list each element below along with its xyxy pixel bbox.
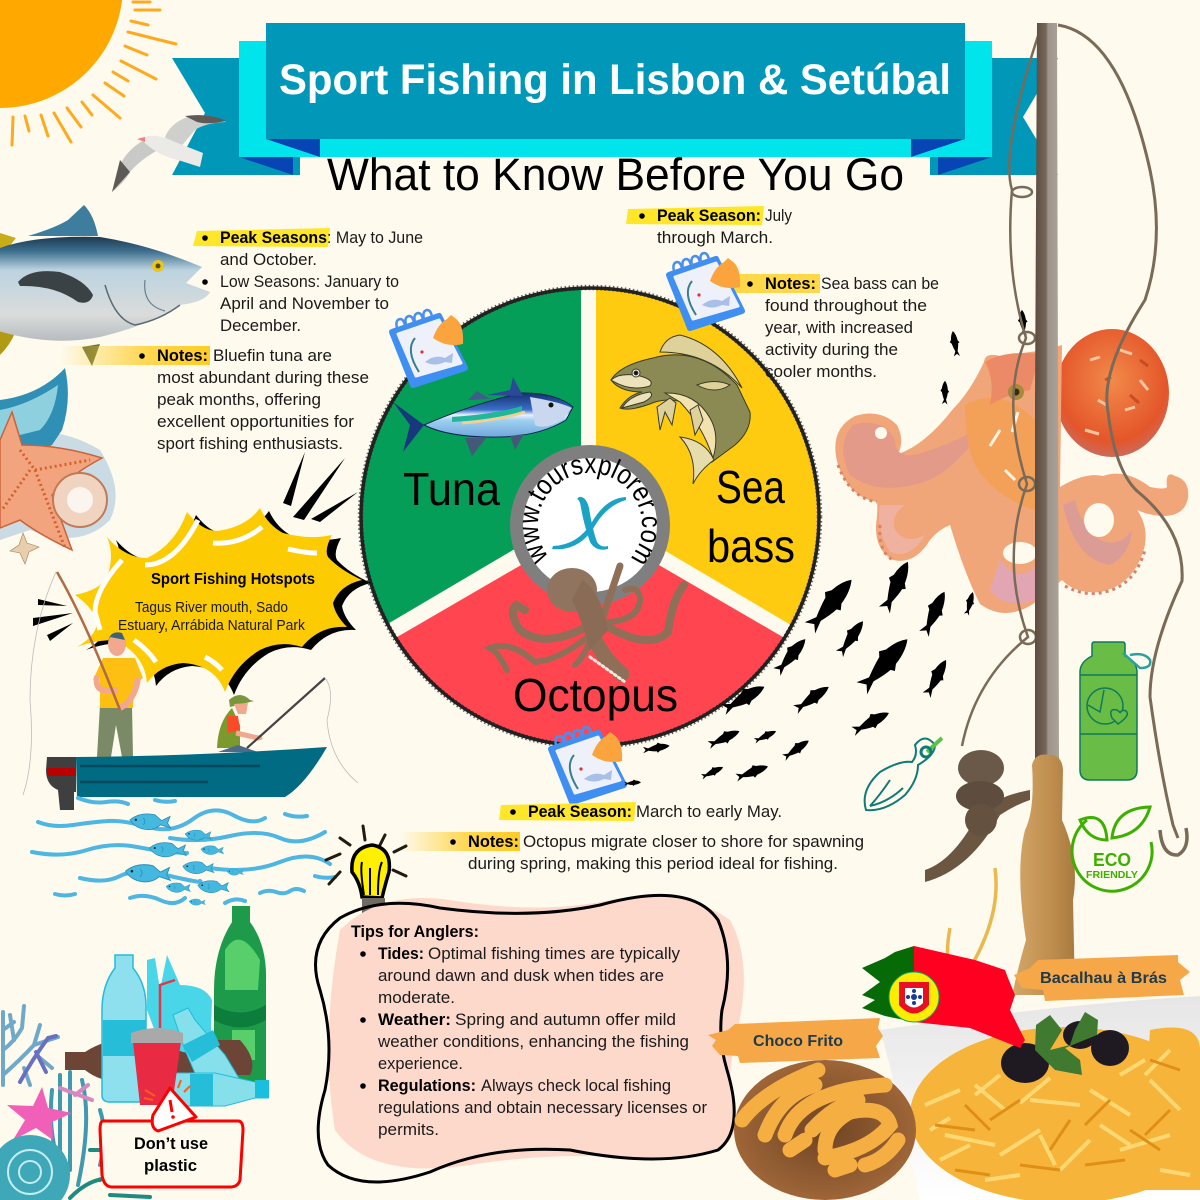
panel: tips for anglers: regulations and obtain necessary licenses or (378, 1098, 707, 1117)
panel: tips for anglers: Tips for Anglers: (351, 922, 479, 941)
text block: tuna: excellent opportunities for (157, 412, 354, 431)
icon: burst spikes left (33, 599, 73, 641)
icon: burst spikes right (283, 452, 358, 522)
panel: tips for anglers: experience. (378, 1054, 463, 1073)
text block: sea bass: year, with increased (765, 318, 913, 337)
text block: tuna: Low Seasons: January to (220, 272, 399, 291)
text block: sea bass (626, 206, 939, 381)
plastic bag (147, 955, 212, 1060)
icon: starfish and shell (0, 368, 116, 564)
icon: portugal flag (862, 946, 1025, 1048)
highlight: sea bass peak season (626, 206, 764, 225)
icon: teal fishing lure (865, 738, 942, 810)
panel: tips for anglers: permits. (378, 1120, 439, 1139)
icon: calendar reminder, sea bass (669, 253, 742, 328)
text block: octopus (400, 802, 864, 873)
panel: tips for anglers: Regulations: (378, 1076, 476, 1095)
text block: sea bass: Peak Season: (657, 206, 761, 225)
text block: octopus: during spring, making this period ideal for fishing. (468, 854, 838, 873)
icon: coral reef (0, 1006, 150, 1200)
icon: big orange octopus (835, 329, 1188, 613)
callout: sport fishing hotspots: Estuary, Arrábida Natural Park (118, 618, 306, 634)
callout: sport fishing hotspots: Sport Fishing Hotspots (151, 571, 315, 588)
icon: sea bass illustration (611, 335, 750, 484)
icon: fishing rod with line (925, 23, 1187, 995)
title banner (266, 23, 965, 139)
tilted bottle (173, 1008, 240, 1085)
wheel rim (360, 288, 820, 746)
panel: tips for anglers: around dawn and dusk when tides are (378, 966, 664, 985)
callout: do not use plastic: Don’t use (134, 1134, 208, 1153)
text block: tuna (60, 228, 423, 453)
green bottle (214, 906, 266, 1082)
text block: sea bass: activity during the (765, 340, 898, 359)
icon: seagull (112, 115, 226, 192)
label: Sea bass: Sea (716, 461, 785, 513)
food: choco frito (734, 1060, 916, 1200)
text block: tuna: sport fishing enthusiasts. (157, 434, 343, 453)
title ribbon tails (172, 41, 1058, 175)
segment: tuna (362, 290, 581, 623)
blue bottle (102, 955, 146, 1102)
icon: fishing boat with anglers (23, 572, 358, 810)
text block: tuna: peak months, offering (157, 390, 321, 409)
highlight: octopus peak season (499, 802, 636, 821)
panel background blob (329, 896, 744, 1168)
icon: tuna illustration (393, 377, 573, 456)
title banner: Sport Fishing in Lisbon & Setúbal (279, 56, 951, 104)
horizontal bottle (170, 1073, 268, 1106)
icon: calendar reminder, tuna (392, 310, 465, 385)
suckers along arms (838, 465, 1145, 594)
icon: bluefin tuna watercolor (0, 205, 210, 366)
highlight: octopus notes (400, 832, 520, 851)
icon: eco friendly badge: ECO (1093, 850, 1131, 870)
text block: tuna: most abundant during these (157, 368, 369, 387)
callout: do not use plastic (100, 1080, 243, 1187)
panel: tips for anglers: Spring and autumn offer mild (455, 1010, 676, 1029)
panel: tips for anglers (316, 895, 744, 1182)
icon: fishing hook (948, 868, 996, 972)
label: choco frito: Choco Frito (753, 1033, 843, 1050)
label: choco frito (708, 1018, 883, 1063)
label: Octopus: Octopus (513, 669, 678, 721)
hub with logo: www.toursxplorer.com (522, 458, 657, 564)
text block: octopus: Octopus migrate closer to shore for spawning (523, 832, 864, 851)
red cup (160, 980, 175, 1028)
panel outline (316, 895, 734, 1182)
text block: octopus: Notes: (468, 832, 519, 851)
panel: tips for anglers: Weather: (378, 1010, 451, 1029)
highlight: notes (60, 346, 210, 365)
text block: sea bass: cooler months. (765, 362, 877, 381)
text block: octopus: Peak Season: (528, 802, 632, 821)
sun (0, 0, 176, 145)
text block: tuna: December. (220, 316, 301, 335)
text block: octopus: March to early May. (636, 802, 782, 821)
panel: tips for anglers: weather conditions, enhancing the fishing (377, 1032, 689, 1051)
panel: tips for anglers: Optimal fishing times are typically (428, 944, 680, 963)
subtitle: What to Know Before You Go (327, 149, 904, 200)
brown bottle (65, 1039, 252, 1081)
label: Tuna: Tuna (403, 463, 500, 515)
callout: sport fishing hotspots: Tagus River mouth, Sado (135, 600, 288, 616)
highlight: sea bass notes (730, 274, 820, 293)
text block: sea bass: through March. (657, 228, 773, 247)
text block: tuna: and October. (220, 250, 317, 269)
text block: sea bass: Notes: (765, 274, 816, 293)
text block: tuna: Notes: (157, 346, 208, 365)
panel: tips for anglers: moderate. (378, 988, 455, 1007)
highlight: peak seasons (193, 228, 330, 247)
icon: light bulb (326, 826, 406, 922)
panel: tips for anglers: Always check local fishing (481, 1076, 671, 1095)
label: bacalhau a bras: Bacalhau à Brás (1040, 970, 1167, 987)
text block: tuna: Peak Seasons (220, 228, 327, 247)
icon: calendar reminder, octopus (551, 727, 624, 802)
icon: eco water bottle (1080, 642, 1150, 780)
fishing line knot (925, 750, 1030, 882)
segment: sea bass (596, 290, 818, 624)
callout: sport fishing hotspots (75, 508, 371, 695)
icon: water waves and blue fish (32, 798, 335, 905)
segment: octopus (397, 565, 783, 742)
icon: plastic waste pile (65, 906, 269, 1106)
text block: sea bass: July (765, 206, 792, 225)
callout: do not use plastic: plastic (144, 1156, 197, 1175)
text block: sea bass: Sea bass can be (821, 274, 939, 293)
food: bacalhau a bras plate (880, 996, 1200, 1200)
icon: eco friendly badge (1072, 807, 1152, 891)
text block: tuna: Bluefin tuna are (213, 346, 332, 365)
label: bacalhau a bras (1014, 955, 1190, 1001)
icon: eco friendly badge: FRIENDLY (1086, 869, 1138, 881)
text block: tuna: April and November to (220, 294, 389, 313)
text block: sea bass: found throughout the (765, 296, 927, 315)
label: Sea bass: bass (707, 520, 795, 572)
main wheel (358, 284, 822, 748)
label: Sea bass (707, 461, 795, 572)
panel: tips for anglers: Tides: (378, 944, 424, 963)
text block: tuna: : May to June (327, 228, 423, 247)
icon: brown octopus (490, 566, 684, 682)
icon: black fish school (624, 309, 1029, 787)
